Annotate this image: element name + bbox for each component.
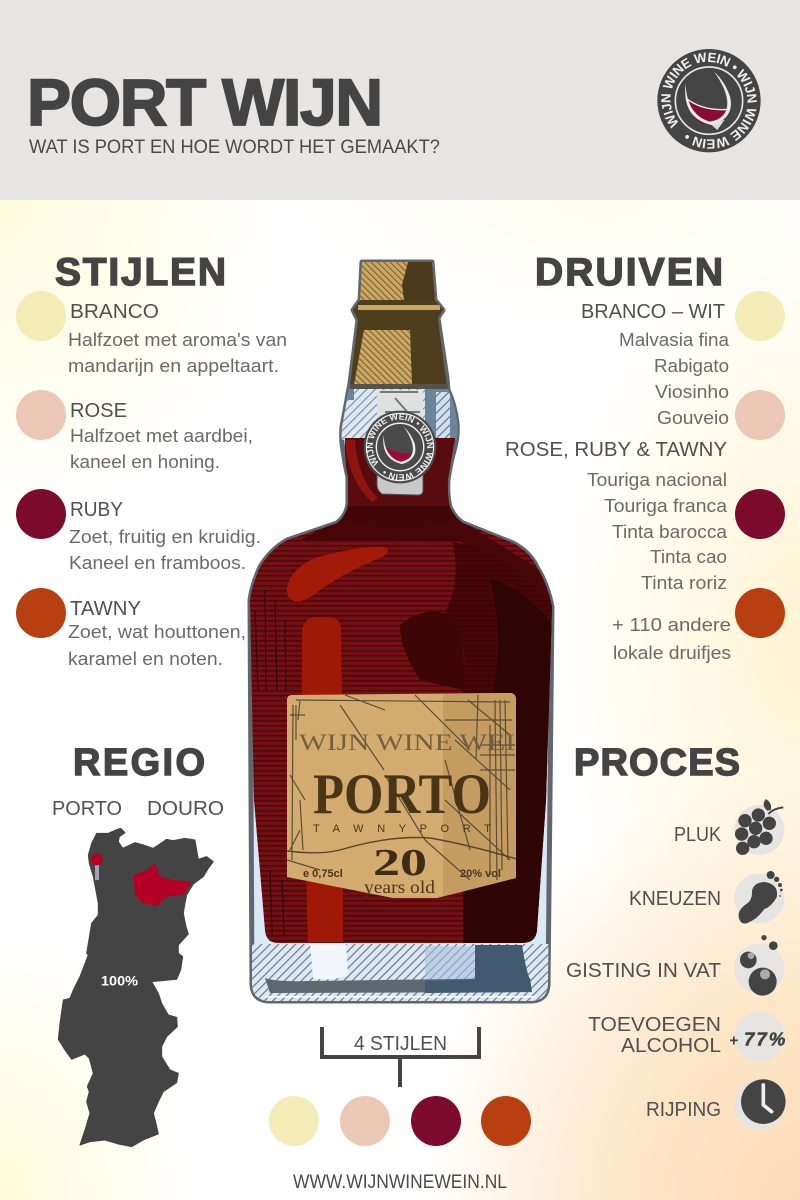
- other grapes note: + 110 andere: [612, 615, 731, 635]
- red grapes list: Tinta barocca: [612, 522, 728, 542]
- capsule: [350, 262, 450, 389]
- neck glass: [340, 388, 460, 440]
- heading: druiven: DRUIVEN: [535, 251, 723, 294]
- rose swatch: [16, 390, 66, 440]
- label text: tawny port: T A W N Y P O R T: [313, 823, 491, 835]
- tawny text: TAWNY: [70, 598, 141, 620]
- red grapes list: Tinta cao: [650, 547, 727, 567]
- icon: plus 77 percent: 77%: [744, 1029, 786, 1050]
- label text: wijn wine wein: WIJN WINE WEI: [299, 730, 515, 755]
- branco text: Halfzoet met aroma's van: [68, 330, 287, 350]
- highlight: shoulder: [287, 547, 388, 602]
- step labels: RIJPING: [646, 1099, 721, 1121]
- step labels: TOEVOEGEN: [588, 1014, 721, 1036]
- branco text: [68, 301, 287, 376]
- bracket: 4 stijlen: 4 STIJLEN: [354, 1033, 447, 1055]
- branco text: BRANCO: [70, 301, 159, 323]
- highlight: left stripe: [302, 617, 343, 950]
- icon: clock: [734, 1079, 786, 1130]
- white grapes list: Viosinho: [655, 382, 729, 402]
- website url: WWW.WIJNWINEWEIN.NL: [293, 1172, 507, 1193]
- step labels: ALCOHOL: [621, 1035, 721, 1057]
- icon: bubbles: [734, 935, 784, 996]
- step labels: KNEUZEN: [629, 888, 721, 910]
- label text: porto: PORTO: [313, 763, 491, 826]
- bottle label: [287, 690, 520, 900]
- ruby text: Zoet, fruitig en kruidig.: [69, 527, 261, 547]
- icon: footprint: [734, 871, 784, 923]
- icon: plus 77 percent: +: [729, 1033, 738, 1050]
- panel: proces: [566, 742, 786, 1130]
- map label: 100%: [101, 973, 138, 988]
- white grapes list: Gouveio: [657, 408, 729, 428]
- label text: volume: e 0,75cl: [303, 868, 343, 880]
- map labels: [52, 798, 224, 820]
- porto pin: [91, 853, 103, 880]
- tawny swatch: [16, 588, 66, 638]
- ruby text: RUBY: [70, 499, 123, 521]
- bottom glass: [252, 943, 550, 1004]
- label text: alcohol: 20% vol: [460, 868, 501, 880]
- heading: regio: REGIO: [73, 742, 205, 784]
- douro region: [133, 863, 192, 906]
- white grapes list: [581, 301, 730, 428]
- panel: druiven: [505, 251, 785, 663]
- heading: proces: PROCES: [574, 742, 740, 784]
- wine body: [240, 430, 560, 950]
- icon: plus 77 percent: [729, 1012, 786, 1062]
- rose text: [70, 400, 253, 472]
- label text: years old: years old: [364, 877, 435, 897]
- white grapes list: Malvasia fina: [619, 330, 730, 350]
- panel: stijlen: [16, 251, 287, 669]
- four style swatches: [269, 1096, 531, 1146]
- white grapes list: BRANCO – WIT: [581, 301, 725, 323]
- neck label: [377, 390, 423, 495]
- tawny text: karamel en noten.: [68, 649, 223, 669]
- title: PORT WIJN: [27, 65, 383, 139]
- swatches: [735, 291, 785, 638]
- icon: grapes: [734, 799, 784, 855]
- rose text: ROSE: [70, 400, 127, 422]
- label text: 20: 20: [373, 842, 427, 884]
- tawny text: [68, 598, 246, 669]
- branco text: mandarijn en appeltaart.: [68, 356, 279, 376]
- tawny text: Zoet, wat houttonen,: [68, 622, 246, 642]
- red grapes list: Tinta roriz: [641, 573, 727, 593]
- ruby text: [69, 499, 261, 573]
- rose text: kaneel en honing.: [70, 452, 220, 472]
- red grapes list: Touriga nacional: [587, 470, 727, 490]
- process icons: [729, 799, 786, 1130]
- map labels: PORTO: [52, 798, 122, 820]
- ruby swatch: [16, 489, 66, 539]
- branco swatch: [16, 291, 66, 341]
- map of portugal: [58, 828, 213, 1147]
- logo: wijn wine wein: WIJN WINE WEIN • WIJN WINE WEIN •: [661, 52, 757, 149]
- other grapes note: [612, 615, 731, 663]
- step labels: PLUK: [674, 824, 722, 846]
- bottle illustration: [248, 260, 554, 1004]
- neck medallion logo: WIJN WINE WEIN • WIJN WINE WEIN •: [367, 414, 433, 480]
- red grapes list: ROSE, RUBY & TAWNY: [505, 439, 727, 461]
- subtitle: WAT IS PORT EN HOE WORDT HET GEMAAKT?: [29, 137, 440, 158]
- other grapes note: lokale druifjes: [613, 643, 731, 663]
- bracket: 4 stijlen: [322, 1027, 479, 1087]
- step labels: [566, 824, 722, 1121]
- step labels: GISTING IN VAT: [566, 960, 721, 982]
- ruby text: Kaneel en framboos.: [69, 553, 246, 573]
- white grapes list: Rabigato: [654, 356, 729, 376]
- panel: regio: [52, 742, 224, 1147]
- red grapes list: [505, 439, 728, 593]
- rose text: Halfzoet met aardbei,: [70, 426, 253, 446]
- map labels: DOURO: [147, 798, 224, 820]
- heading: stijlen: STIJLEN: [55, 251, 226, 294]
- header band: [0, 0, 800, 200]
- red grapes list: Touriga franca: [604, 496, 728, 516]
